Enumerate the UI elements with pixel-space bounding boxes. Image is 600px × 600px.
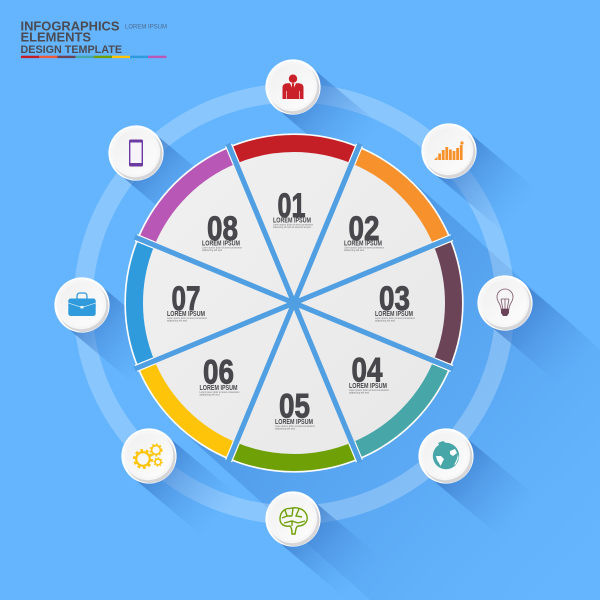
label 07: LOREM IPSUM xyxy=(167,311,205,318)
icon: globe xyxy=(433,441,459,469)
label 06: 06 xyxy=(203,354,234,392)
title line 2: ELEMENTS xyxy=(20,30,91,45)
label 02: adipiscing elit sed xyxy=(344,248,365,252)
pie long shadow xyxy=(180,177,600,600)
icon: growth chart xyxy=(434,141,464,160)
icon badge: brain xyxy=(265,491,321,547)
label 03: Lorem ipsum dolor sit amet consectetur xyxy=(375,316,415,320)
title block xyxy=(20,18,167,58)
white spoke edging xyxy=(136,145,452,461)
icon badge: gears xyxy=(121,428,177,484)
label 03: adipiscing elit sed xyxy=(375,318,396,322)
label 01: Lorem ipsum dolor sit amet consectetur xyxy=(273,222,313,226)
label 04: 04 xyxy=(352,352,383,390)
icon badge: smartphone xyxy=(108,125,164,181)
icon badge: growth chart xyxy=(421,123,477,179)
label 01: 01 xyxy=(278,187,306,225)
label 05: Lorem ipsum dolor sit amet consectetur xyxy=(275,424,315,428)
segment band 01 xyxy=(230,135,358,163)
label 07: adipiscing elit sed xyxy=(167,318,188,322)
label 08: Lorem ipsum dolor sit amet consectetur xyxy=(202,246,242,250)
colour bar xyxy=(21,56,166,58)
title line 3: DESIGN TEMPLATE xyxy=(20,44,122,56)
label 06: adipiscing elit sed xyxy=(200,392,220,396)
icon: brain xyxy=(280,508,307,534)
label 02: 02 xyxy=(348,210,380,248)
segment band 04 xyxy=(347,356,458,467)
label 03: 03 xyxy=(379,280,410,318)
label 04: adipiscing elit sed xyxy=(349,390,370,394)
label 02: Lorem ipsum dolor sit amet consectetur xyxy=(344,246,384,250)
segment band 02 xyxy=(347,139,458,250)
icon badge: briefcase xyxy=(54,277,110,333)
subtitle: LOREM IPSUM xyxy=(125,24,167,30)
icon: smartphone xyxy=(129,140,143,166)
label 08: adipiscing elit sed xyxy=(202,248,223,252)
label 05: 05 xyxy=(279,388,310,426)
segment band 05 xyxy=(230,443,358,471)
label 07: 07 xyxy=(172,280,200,318)
title line 1: INFOGRAPHICS xyxy=(20,18,120,33)
label 03: LOREM IPSUM xyxy=(375,311,413,318)
label 02: LOREM IPSUM xyxy=(344,240,382,248)
segment band 07 xyxy=(126,239,154,367)
label 01: LOREM IPSUM xyxy=(273,218,311,224)
icon badge: globe xyxy=(418,428,474,484)
outer translucent ring xyxy=(83,93,505,515)
label 05: adipiscing elit sed xyxy=(275,426,296,430)
icon: person xyxy=(282,74,304,99)
label 04: LOREM IPSUM xyxy=(349,383,387,390)
label 07: Lorem ipsum dolor sit amet consectetur xyxy=(167,316,207,320)
label 06: LOREM IPSUM xyxy=(200,385,238,392)
label 08: LOREM IPSUM xyxy=(202,240,240,248)
icon: briefcase xyxy=(68,293,96,316)
segment band 06 xyxy=(130,356,241,467)
icon badge: light bulb xyxy=(477,275,533,331)
pie base xyxy=(125,134,463,472)
label 06: Lorem ipsum dolor sit amet consectetur xyxy=(200,390,240,394)
label 05: LOREM IPSUM xyxy=(275,419,313,426)
label 08: 08 xyxy=(207,210,238,248)
label 01: adipiscing elit sed do eiusmod tempor xyxy=(273,225,311,229)
icon badge: person xyxy=(265,59,321,115)
pie chart xyxy=(125,134,463,472)
icon long shadows xyxy=(65,66,595,599)
icon: light bulb xyxy=(497,289,513,316)
segment band 08 xyxy=(130,139,241,250)
label 04: Lorem ipsum dolor sit amet consectetur xyxy=(349,388,389,392)
icon: gears xyxy=(134,444,162,468)
segment band 03 xyxy=(434,239,462,367)
spokes xyxy=(135,144,453,462)
